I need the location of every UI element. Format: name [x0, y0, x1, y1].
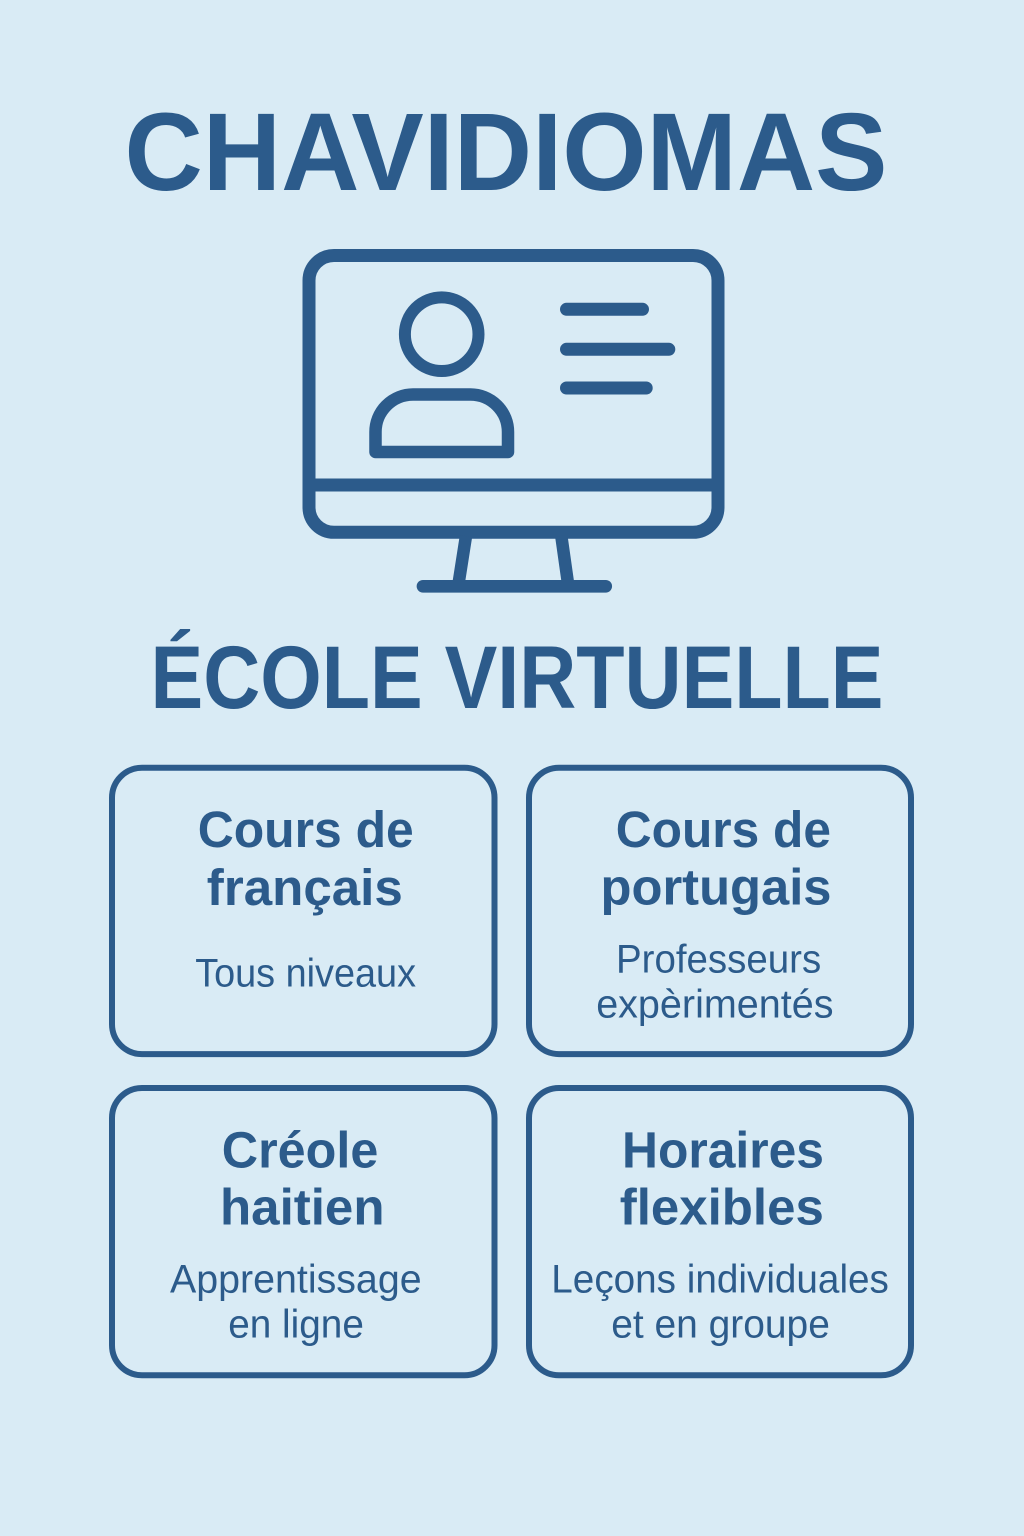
heading: créole haitien: Créole [222, 1121, 378, 1178]
text: apprentissage en ligne: en ligne [228, 1302, 364, 1346]
panel: horaires flexibles [529, 1088, 911, 1375]
text: professeurs expèrimentés: expèrimentés [596, 982, 834, 1026]
heading: horaires flexibles: Horaires [622, 1121, 824, 1178]
heading: cours de portugais: portugais [600, 859, 832, 916]
panel: cours de portugais [529, 768, 911, 1054]
heading: cours de français: Cours de [198, 801, 414, 858]
heading: cours de français: français [207, 859, 403, 916]
text: professeurs expèrimentés: Professeurs [616, 938, 821, 982]
icon: computer monitor with user profile [309, 256, 718, 586]
text: apprentissage en ligne [170, 1258, 422, 1346]
text: professeurs expèrimentés [596, 938, 834, 1026]
heading: cours de portugais [600, 801, 832, 916]
heading: cours de portugais: Cours de [616, 801, 831, 858]
panel: créole haitien [112, 1088, 494, 1375]
heading: horaires flexibles [620, 1121, 824, 1236]
title: CHAVIDIOMAS [124, 91, 888, 214]
heading: créole haitien [220, 1121, 384, 1236]
heading: créole haitien: haitien [220, 1179, 384, 1236]
text: leçons individuales et en groupe: et en groupe [611, 1302, 830, 1346]
heading: cours de français [198, 801, 414, 916]
subtitle: ÉCOLE VIRTUELLE [150, 627, 884, 727]
text: apprentissage en ligne: Apprentissage [170, 1258, 422, 1302]
panel: cours de français [112, 768, 494, 1054]
text: leçons individuales et en groupe [551, 1258, 889, 1346]
text: leçons individuales et en groupe: Leçons individuales [551, 1258, 889, 1302]
text: tous niveaux: Tous niveaux [195, 952, 416, 996]
heading: horaires flexibles: flexibles [620, 1179, 824, 1236]
